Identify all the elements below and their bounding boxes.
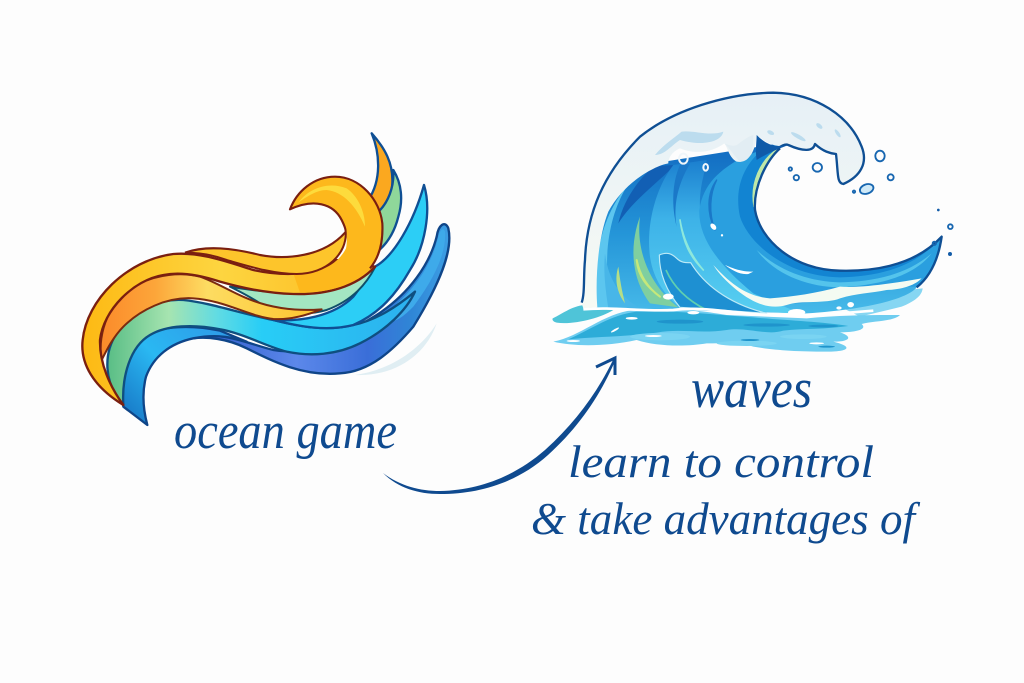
light curl stripe <box>757 250 932 287</box>
arrow from ocean game to waves <box>383 358 615 494</box>
water light patches <box>630 333 827 346</box>
label: waves: waves <box>691 358 812 420</box>
blue lower band <box>193 224 449 374</box>
sky blue tail <box>122 327 247 425</box>
crown highlight <box>298 185 365 227</box>
label: ocean game: ocean game <box>174 403 397 460</box>
water teal patch <box>568 311 848 339</box>
left band dark top <box>618 165 675 223</box>
mint strip <box>230 267 375 313</box>
green streak right <box>633 217 678 307</box>
cyan band <box>649 160 807 314</box>
white flecks <box>663 222 854 316</box>
water dark streaks <box>657 320 838 348</box>
green spike <box>377 170 401 249</box>
orange spike <box>368 133 392 233</box>
blue band highlight <box>380 229 445 321</box>
spray dots <box>937 209 952 256</box>
foam <box>582 93 864 308</box>
water main <box>553 309 900 352</box>
foam dark edge <box>756 135 788 160</box>
water white flecks <box>567 311 824 344</box>
left band light base <box>604 253 640 308</box>
water surface <box>552 288 923 352</box>
main yellow band <box>82 254 375 405</box>
cyan band streak <box>680 220 703 270</box>
dark stripe in cyan band <box>673 163 690 227</box>
logo shadow <box>355 323 437 375</box>
arrow shaft <box>383 360 615 494</box>
white streak <box>713 265 922 307</box>
foam white blob <box>724 135 753 162</box>
water tail pool <box>840 288 923 317</box>
upper yellow strand fill <box>185 233 345 274</box>
middle blue band <box>699 143 942 303</box>
lime streak <box>637 260 660 297</box>
foam outline <box>582 93 864 303</box>
logo: ocean game swirl <box>82 133 449 425</box>
dark inner patch <box>659 253 767 313</box>
small white streak <box>725 265 753 274</box>
strand lower outline <box>185 232 346 274</box>
water left pool <box>552 305 613 323</box>
cyan spike <box>273 185 427 328</box>
green to cyan band <box>107 292 415 405</box>
patch green streak <box>666 270 707 310</box>
curl outline <box>755 148 942 287</box>
text: and take advantages of: & take advantages of <box>531 493 921 544</box>
crown and strand top outline <box>185 177 382 268</box>
orange yellow band <box>101 274 322 360</box>
yellow crown fill <box>290 177 382 293</box>
foam shading <box>655 122 842 155</box>
dark curl stripe <box>738 143 942 277</box>
lime small streak <box>616 267 625 303</box>
water white line <box>583 309 873 315</box>
illustration: breaking wave <box>552 93 953 352</box>
middle band highlight <box>709 180 717 230</box>
spray bubbles <box>679 151 953 245</box>
wave body <box>595 143 942 313</box>
green curl rim <box>753 148 779 207</box>
left band rim <box>596 187 627 308</box>
arrow head <box>596 358 615 375</box>
text: learn to control: learn to control <box>568 436 874 487</box>
